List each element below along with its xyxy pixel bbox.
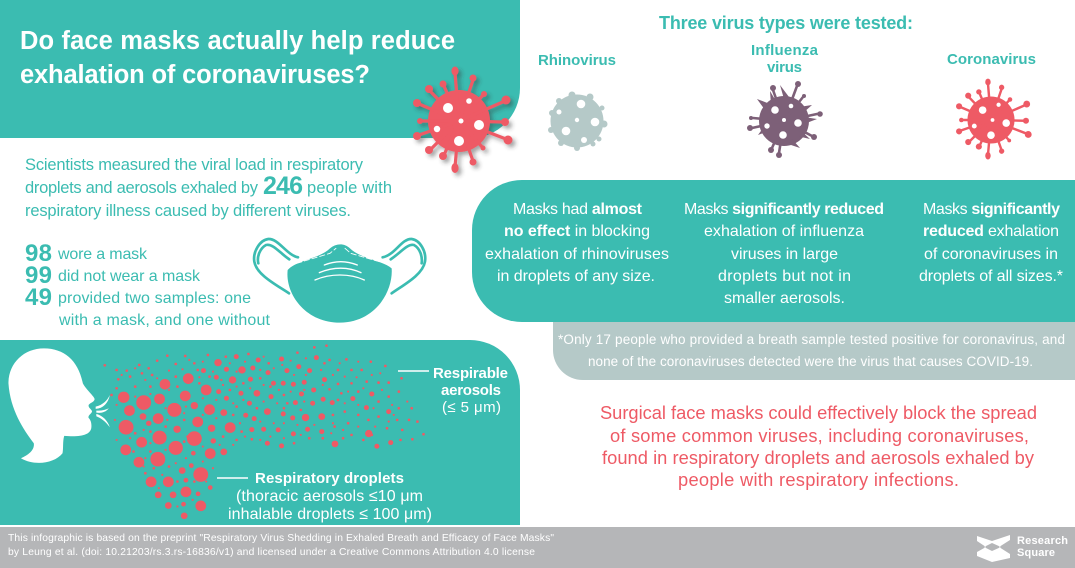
icon: rhinovirus bbox=[548, 92, 608, 151]
icon: influenza virus bbox=[747, 81, 823, 158]
text block: coronavirus finding: reduced exhalation bbox=[923, 223, 1059, 240]
text block: participant counts: wore a mask bbox=[57, 246, 148, 263]
text block: rhinovirus finding: in droplets of any size. bbox=[497, 268, 655, 285]
text block: study summary: droplets and aerosols exhaled by bbox=[25, 179, 259, 197]
title: exhalation of coronaviruses? bbox=[20, 61, 370, 89]
callout: respirable aerosols: Respirable bbox=[433, 365, 508, 382]
icon: head exhaling bbox=[8, 348, 110, 463]
icon: large coronavirus bbox=[413, 66, 512, 173]
icon: face mask bbox=[254, 239, 425, 323]
text block: coronavirus finding: Masks significantly bbox=[923, 201, 1060, 218]
callout: respirable aerosols bbox=[398, 365, 508, 416]
text block: rhinovirus finding: Masks had almost bbox=[513, 201, 643, 218]
panel: footnote bbox=[553, 322, 1075, 380]
text block: influenza finding: viruses in large bbox=[731, 246, 838, 263]
text block: influenza finding: exhalation of influenza bbox=[704, 223, 864, 240]
text block: participant counts: 49 bbox=[25, 284, 52, 311]
title: Do face masks actually help reduce bbox=[20, 27, 455, 55]
text block: participant counts: 99 bbox=[25, 262, 52, 289]
callout: respiratory droplets bbox=[217, 470, 432, 523]
label: influenza virus: Influenza bbox=[751, 42, 819, 59]
text block: study summary bbox=[25, 156, 392, 220]
text block: rhinovirus finding: exhalation of rhinoviruses bbox=[485, 246, 669, 263]
chart: droplet cloud bbox=[105, 346, 424, 519]
callout: respiratory droplets: inhalable droplets ≤ 100 μm) bbox=[228, 506, 432, 523]
callout: respiratory droplets: Respiratory droplets bbox=[255, 470, 404, 487]
label: coronavirus: Coronavirus bbox=[947, 51, 1036, 68]
text block: rhinovirus finding: no effect in blocking bbox=[504, 223, 650, 240]
icon: Research Square logo bbox=[977, 535, 1010, 562]
text block: attribution: by Leung et al. (doi: 10.21203/rs.3.rs-16836/v1) and licensed under a Creative Commons Attribution 4.0 license bbox=[8, 547, 535, 558]
panel: title banner bbox=[0, 0, 520, 138]
panel: footnote: none of the coronaviruses detected were the virus that causes COVID-19. bbox=[588, 354, 1033, 369]
text block: participant counts: provided two samples: one bbox=[58, 290, 251, 307]
text block: participant counts: with a mask, and one without bbox=[58, 312, 271, 329]
text: Research Square wordmark bbox=[1017, 535, 1068, 559]
panel: footnote: *Only 17 people who provided a breath sample tested positive for coronavirus, and bbox=[558, 332, 1065, 347]
text: Research Square wordmark: Square bbox=[1017, 547, 1055, 559]
text: Research Square wordmark: Research bbox=[1017, 535, 1068, 547]
text block: conclusion: of some common viruses, including coronaviruses, bbox=[610, 425, 1029, 446]
callout: respirable aerosols: aerosols bbox=[441, 382, 501, 399]
text block: coronavirus finding bbox=[919, 201, 1063, 285]
callout: respiratory droplets: (thoracic aerosols ≤10 μm bbox=[236, 488, 423, 505]
title bbox=[20, 27, 455, 89]
label: rhinovirus: Rhinovirus bbox=[538, 52, 616, 69]
text block: participant counts bbox=[25, 240, 271, 329]
text block: study summary: respiratory illness caused by different viruses. bbox=[25, 202, 351, 220]
text block: attribution: This infographic is based on the preprint "Respiratory Virus Shedding in Exhaled Breath and Efficacy of Face Masks" bbox=[8, 533, 554, 544]
panel: respiratory droplets and aerosols bbox=[0, 340, 520, 525]
text block: coronavirus finding: droplets of all sizes.* bbox=[919, 268, 1063, 285]
text block: study summary: 246 bbox=[263, 172, 303, 200]
text block: influenza finding: Masks significantly reduced bbox=[684, 201, 884, 218]
icon: coronavirus bbox=[956, 79, 1032, 160]
callout: respirable aerosols: (≤ 5 μm) bbox=[442, 399, 501, 416]
text block: attribution bbox=[8, 533, 554, 558]
text block: study summary: people with bbox=[307, 179, 392, 197]
text block: conclusion: found in respiratory droplets and aerosols exhaled by bbox=[602, 447, 1035, 468]
text block: coronavirus finding: of coronaviruses in bbox=[924, 246, 1058, 263]
text block: influenza finding: smaller aerosols. bbox=[724, 290, 845, 307]
text block: influenza finding: droplets but not in bbox=[718, 268, 851, 285]
text block: influenza finding bbox=[684, 201, 884, 307]
panel: footer bbox=[0, 527, 1075, 568]
text block: rhinovirus finding bbox=[485, 201, 669, 285]
heading: virus types: Three virus types were tested: bbox=[659, 13, 913, 33]
text block: conclusion: people with respiratory infections. bbox=[678, 469, 959, 490]
text block: conclusion: Surgical face masks could effectively block the spread bbox=[600, 402, 1037, 423]
text block: participant counts: 98 bbox=[25, 240, 52, 267]
text block: participant counts: did not wear a mask bbox=[58, 268, 201, 285]
text block: study summary: Scientists measured the viral load in respiratory bbox=[25, 156, 364, 174]
text block: conclusion bbox=[600, 402, 1037, 490]
panel: findings bbox=[472, 180, 1075, 322]
label: influenza virus: virus bbox=[767, 59, 802, 76]
label: influenza virus bbox=[751, 42, 819, 76]
